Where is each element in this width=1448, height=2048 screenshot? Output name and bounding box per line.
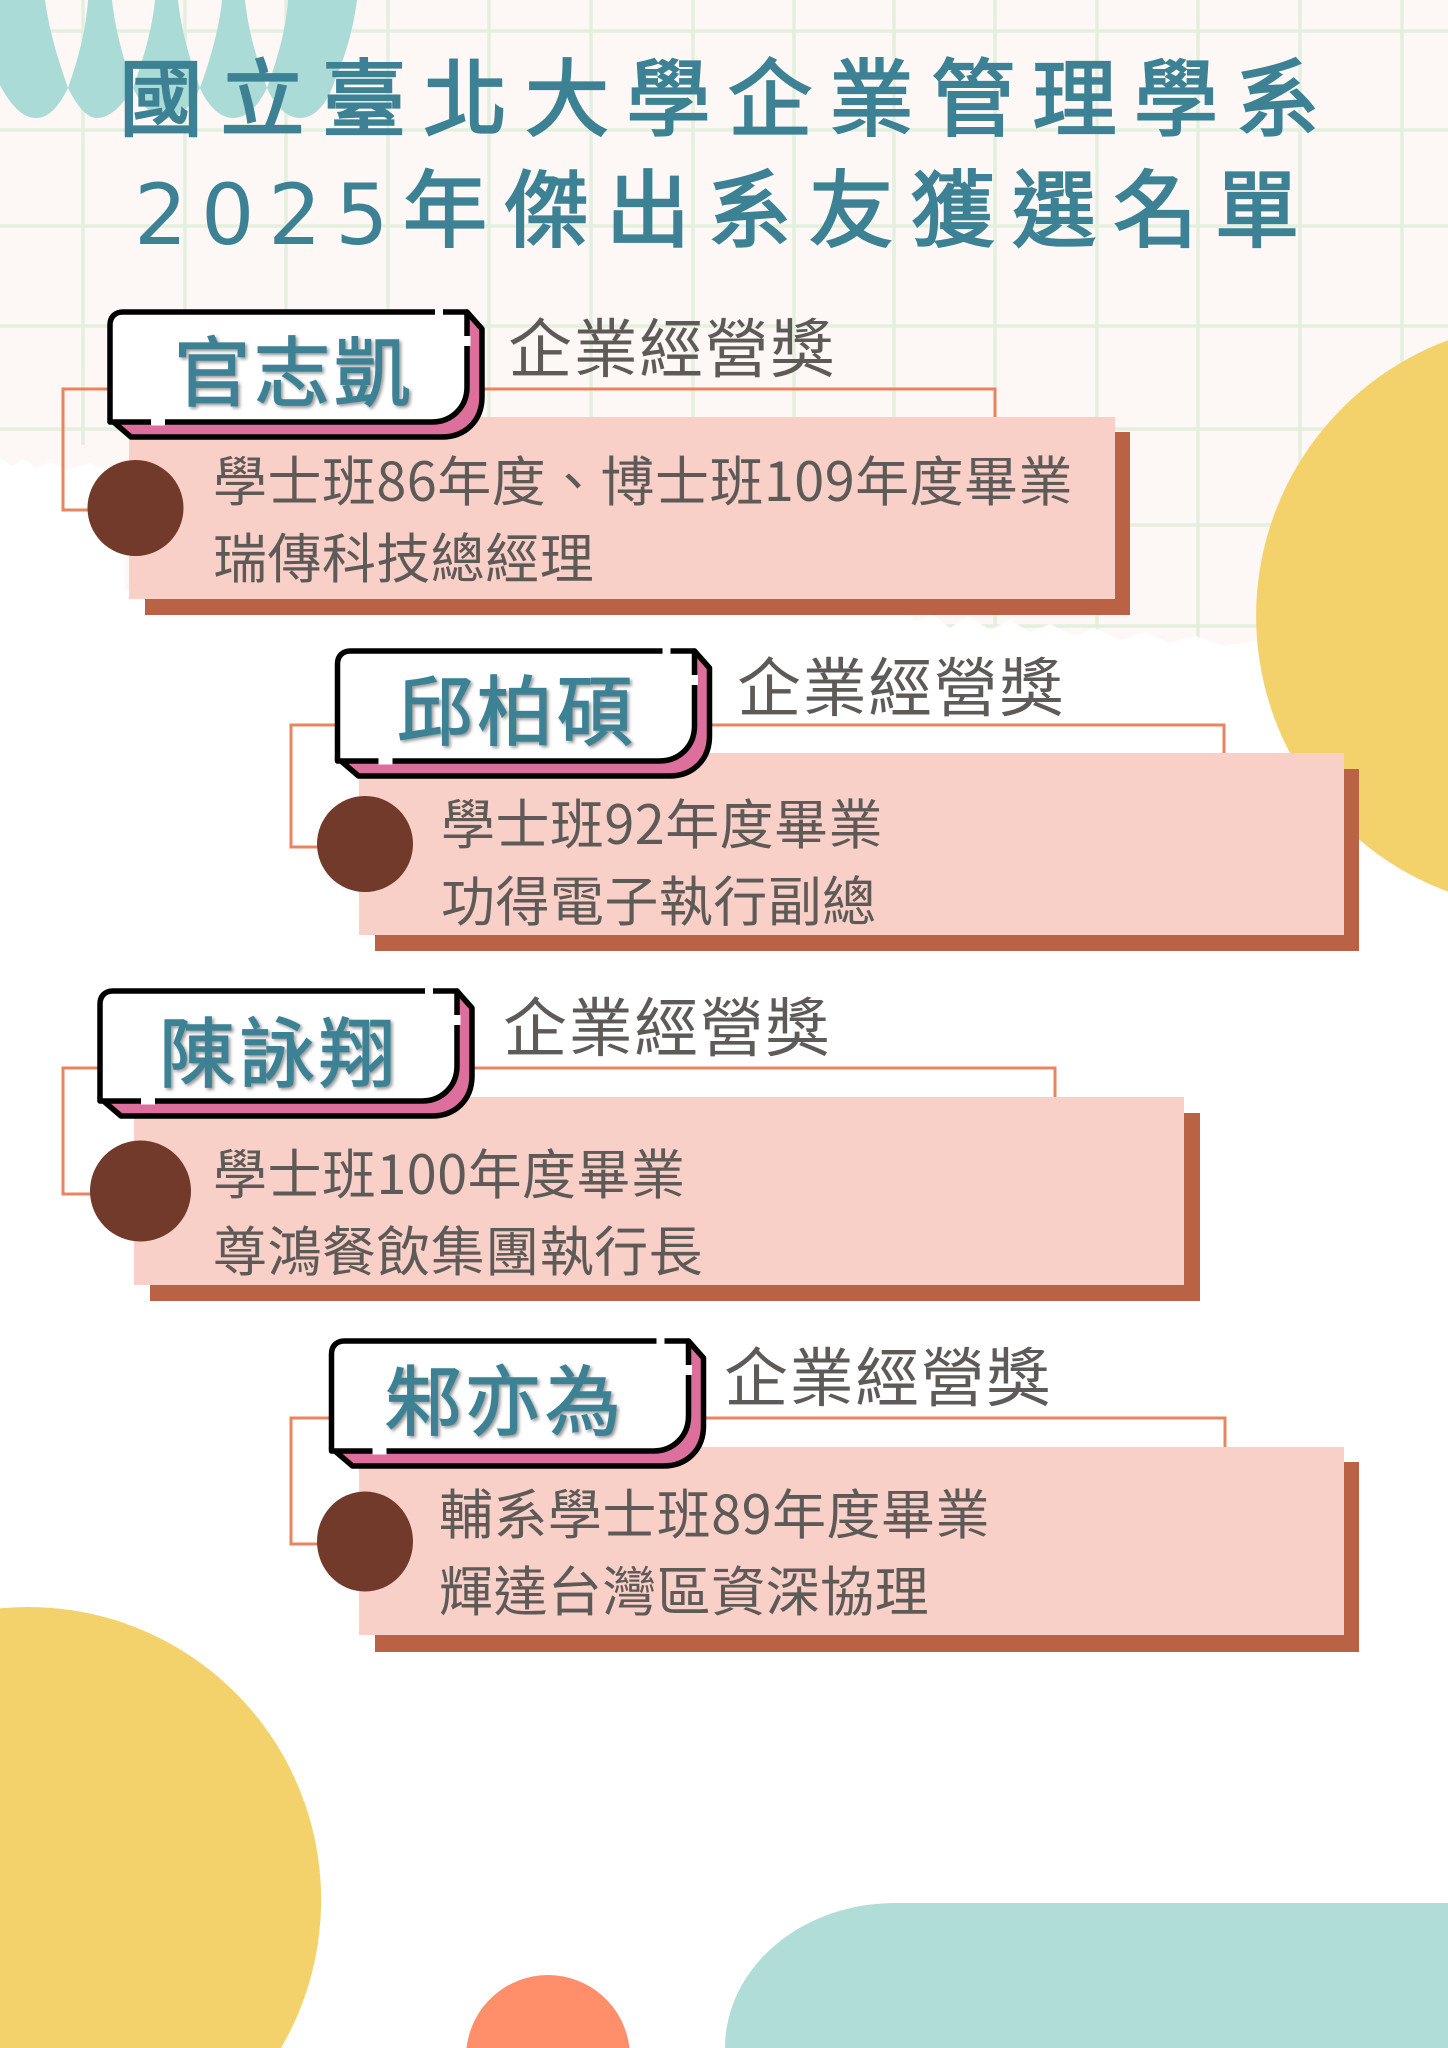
name 4: 邾亦為 <box>385 1341 625 1451</box>
connector line 2 <box>291 725 1224 847</box>
description 2: 功得電子執行副總 <box>441 858 877 937</box>
description 3: 學士班100年度畢業 <box>213 1131 685 1210</box>
bullet circle 2 <box>317 796 413 892</box>
award 3: 企業經營獎 <box>503 978 831 1070</box>
name tag 3 <box>100 991 472 1116</box>
decoration: teal scallops top left <box>0 0 357 118</box>
entry 3 <box>63 978 1200 1301</box>
name 3: 陳詠翔 <box>159 993 399 1103</box>
background: grid paper <box>0 0 1448 646</box>
bullet circle 4 <box>317 1492 413 1592</box>
panel 4 <box>359 1447 1344 1635</box>
description 4 <box>439 1471 990 1627</box>
decoration: yellow circle bottom left <box>0 1607 321 2048</box>
panel 3 <box>134 1097 1184 1285</box>
description 4: 輝達台灣區資深協理 <box>439 1548 929 1627</box>
description 2: 學士班92年度畢業 <box>441 781 883 860</box>
decoration: yellow circle right <box>1256 340 1448 892</box>
connector line 1 <box>63 389 995 510</box>
connector line 4 <box>291 1418 1225 1544</box>
bullet circle 1 <box>88 460 184 556</box>
name tag 1 <box>110 312 482 437</box>
bullet circle 3 <box>90 1140 191 1242</box>
connector line 3 <box>63 1068 1055 1194</box>
decoration: orange circle bottom <box>466 1975 630 2048</box>
description 2 <box>441 781 883 937</box>
name 1: 官志凱 <box>174 312 414 422</box>
description 3 <box>213 1131 703 1287</box>
title: 2025 <box>134 166 402 264</box>
award 4: 企業經營獎 <box>724 1328 1052 1420</box>
panel shadow 3 <box>150 1113 1200 1301</box>
panel shadow 2 <box>375 769 1359 951</box>
entry 2 <box>291 638 1359 951</box>
award 1: 企業經營獎 <box>508 299 836 391</box>
description 1: 瑞傳科技總經理 <box>213 515 594 594</box>
title: 年傑出系友獲選名單 <box>403 144 1317 265</box>
description 3: 尊鴻餐飲集團執行長 <box>213 1208 703 1287</box>
title <box>119 33 1337 265</box>
title: 國立臺北大學企業管理學系 <box>119 33 1337 154</box>
entry 4 <box>291 1328 1359 1652</box>
panel 1 <box>129 417 1115 599</box>
name tag 2 <box>338 651 710 776</box>
panel 2 <box>359 753 1344 935</box>
entry 1 <box>63 299 1130 615</box>
name tag 4 <box>332 1341 704 1466</box>
panel shadow 4 <box>375 1462 1359 1652</box>
award 2: 企業經營獎 <box>737 638 1065 730</box>
description 4: 輔系學士班89年度畢業 <box>439 1471 990 1550</box>
panel shadow 1 <box>145 432 1130 615</box>
name 2: 邱柏碩 <box>397 651 637 761</box>
description 1: 學士班86年度、博士班109年度畢業 <box>213 438 1073 517</box>
decoration: teal rounded block bottom right <box>725 1903 1448 2048</box>
description 1 <box>213 438 1073 594</box>
